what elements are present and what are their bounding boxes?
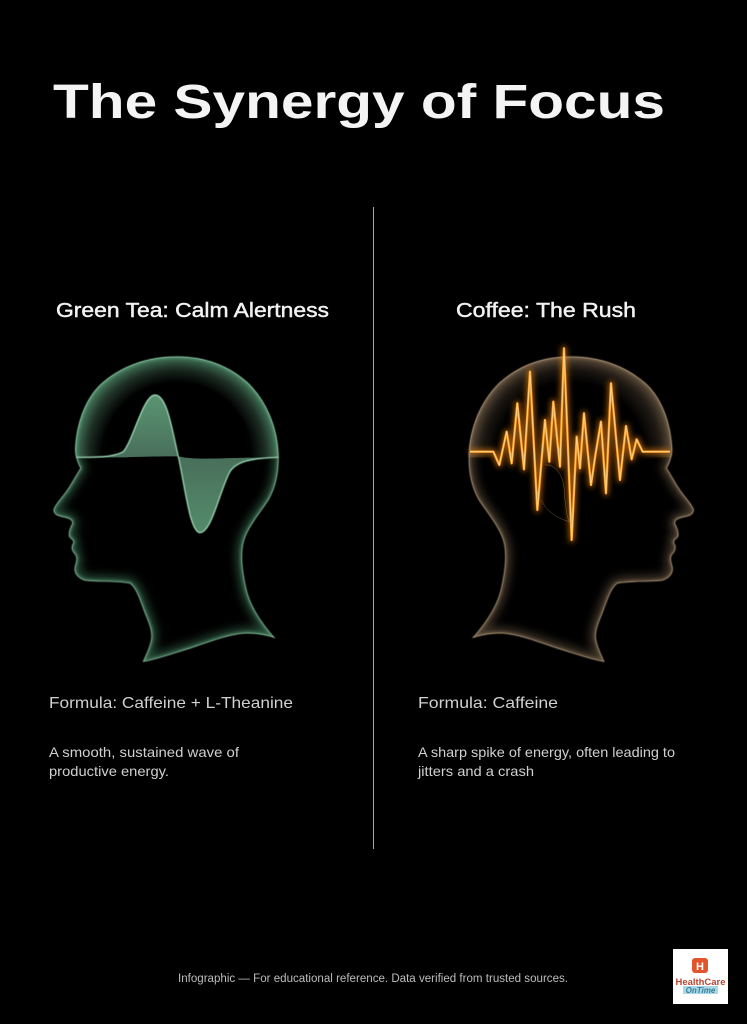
footer note: Infographic — For educational reference. Data verified from trusted sources.	[178, 973, 568, 985]
title: The Synergy of Focus	[53, 76, 665, 129]
coffee head illustration with spiky wave	[466, 348, 694, 662]
logo tagline: OnTime	[686, 986, 716, 995]
icon: H badge: H	[696, 961, 704, 973]
coffee description: jitters and a crash	[417, 763, 534, 779]
logo	[673, 949, 728, 1004]
green tea description: A smooth, sustained wave of	[49, 744, 239, 760]
coffee description: A sharp spike of energy, often leading to	[418, 744, 675, 760]
coffee heading: Coffee: The Rush	[456, 300, 636, 322]
green tea description: productive energy.	[49, 763, 169, 779]
green tea heading: Green Tea: Calm Alertness	[56, 300, 329, 322]
green head illustration with smooth wave	[54, 353, 282, 662]
green tea formula: Formula: Caffeine + L-Theanine	[49, 695, 293, 712]
panel: coffee	[417, 300, 694, 779]
coffee formula: Formula: Caffeine	[418, 695, 558, 712]
panel: green tea	[49, 300, 329, 779]
logo wordmark: HealthCare	[676, 977, 726, 988]
center divider	[373, 207, 374, 849]
